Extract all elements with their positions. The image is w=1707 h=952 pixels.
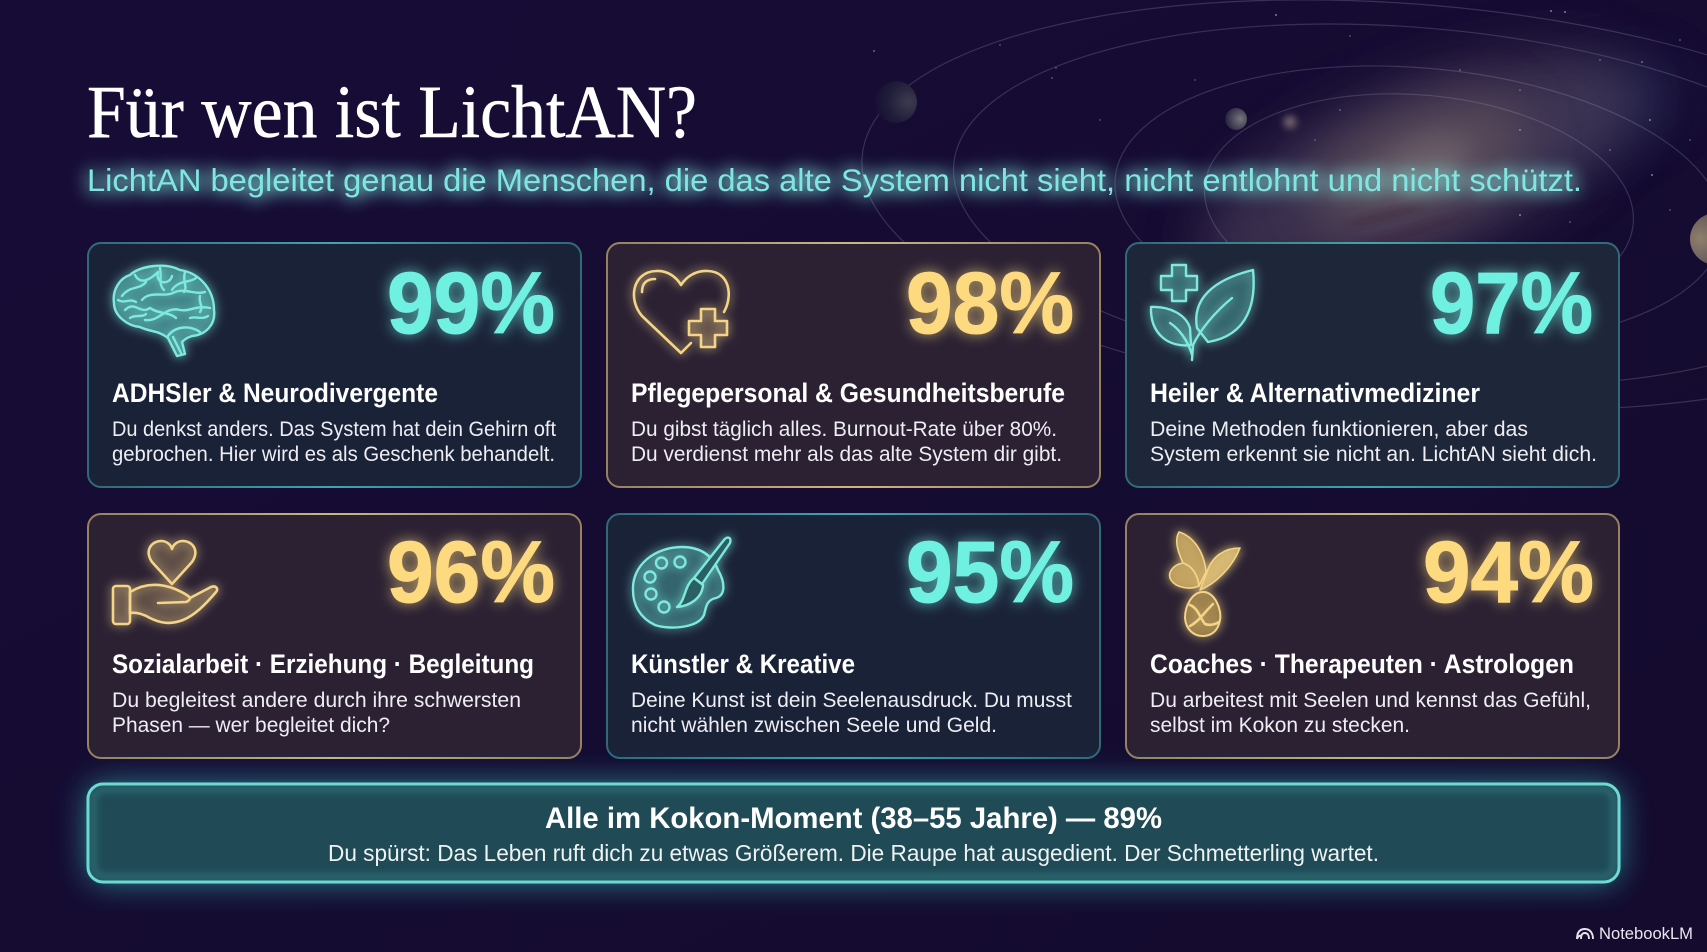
banner text: Du spürst: Das Leben ruft dich zu etwas Größerem. Die Raupe hat ausgedient. Der Schmetterling wartet. — [328, 840, 1379, 866]
panel: Sozialarbeit · Erziehung · Begleitung — [88, 514, 581, 758]
icon: brain — [114, 266, 214, 356]
stat: 97%: 97% — [1430, 255, 1593, 352]
heading: ADHSler & Neurodivergente — [112, 378, 438, 408]
banner heading: Alle im Kokon-Moment (38–55 Jahre) — 89% — [545, 802, 1162, 835]
orbits — [845, 0, 1707, 453]
title: Für wen ist LichtAN? — [87, 71, 697, 154]
description: System erkennt sie nicht an. LichtAN sieht dich. — [1150, 443, 1597, 466]
description: Du verdienst mehr als das alte System dir gibt. — [631, 443, 1062, 466]
panel: Künstler & Kreative — [607, 514, 1100, 758]
heading: Pflegepersonal & Gesundheitsberufe — [631, 378, 1065, 408]
stat: 96%: 96% — [387, 524, 555, 621]
description — [112, 689, 521, 737]
description: Du begleitest andere durch ihre schwersten — [112, 689, 521, 712]
stat: 95%: 95% — [906, 524, 1074, 621]
description — [631, 418, 1062, 466]
galaxy — [1170, 3, 1693, 337]
description: Du denkst anders. Das System hat dein Gehirn oft — [112, 418, 556, 441]
heading: Heiler & Alternativmediziner — [1150, 378, 1480, 408]
heading: Sozialarbeit · Erziehung · Begleitung — [112, 649, 534, 679]
description — [1150, 689, 1591, 737]
icon: palette and brush — [633, 538, 730, 628]
description: Deine Kunst ist dein Seelenausdruck. Du musst — [631, 689, 1072, 712]
panel: Coaches · Therapeuten · Astrologen — [1126, 514, 1619, 758]
callout banner — [88, 784, 1619, 882]
icon: butterfly and cocoon — [1170, 532, 1240, 636]
description — [631, 689, 1072, 737]
heading: Coaches · Therapeuten · Astrologen — [1150, 649, 1574, 679]
description: Deine Methoden funktionieren, aber das — [1150, 418, 1528, 441]
planets — [875, 81, 1707, 265]
description: Du arbeitest mit Seelen und kennst das Gefühl, — [1150, 689, 1591, 712]
panel: ADHSler & Neurodivergente — [88, 243, 581, 487]
stars — [873, 10, 1691, 223]
space backdrop: galaxy, orbits and planets — [845, 0, 1707, 453]
heading: Künstler & Kreative — [631, 649, 855, 679]
watermark: NotebookLM: NotebookLM — [1599, 925, 1693, 943]
description: Phasen — wer begleitet dich? — [112, 714, 390, 737]
description — [1150, 418, 1597, 466]
stat: 94%: 94% — [1423, 524, 1594, 621]
description: selbst im Kokon zu stecken. — [1150, 714, 1410, 737]
stat: 98%: 98% — [906, 255, 1074, 352]
panel: Pflegepersonal & Gesundheitsberufe — [607, 243, 1100, 487]
description: gebrochen. Hier wird es als Geschenk behandelt. — [112, 443, 555, 466]
subtitle: LichtAN begleitet genau die Menschen, die das alte System nicht sieht, nicht entlohnt und nicht schützt. — [87, 162, 1582, 198]
icon: hand holding heart — [113, 541, 217, 624]
icon: NotebookLM logo — [1577, 929, 1593, 939]
description — [112, 418, 556, 466]
description: Du gibst täglich alles. Burnout-Rate über 80%. — [631, 418, 1057, 441]
icon: heart with plus — [634, 271, 729, 353]
panel: Heiler & Alternativmediziner — [1126, 243, 1619, 487]
description: nicht wählen zwischen Seele und Geld. — [631, 714, 997, 737]
icon: leaves with plus — [1151, 265, 1254, 360]
stat: 99%: 99% — [387, 255, 555, 352]
